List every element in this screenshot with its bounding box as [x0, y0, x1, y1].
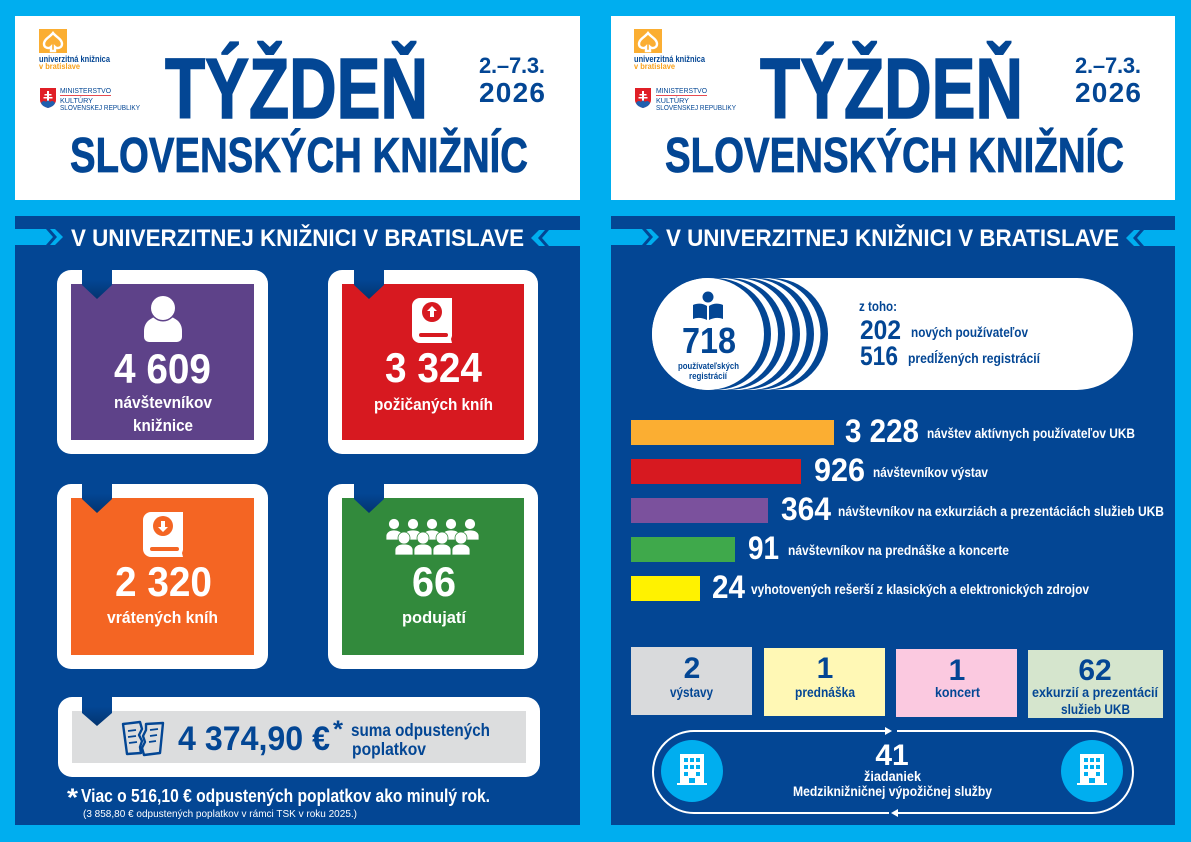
logo: university library: [39, 29, 111, 71]
box: concert: 1: [949, 654, 965, 687]
box: excursions: exkurzií a prezentácií: [1032, 684, 1159, 700]
bar: exhibitions: návštevníkov výstav: [873, 465, 988, 480]
total value: 718: [682, 320, 736, 361]
bar: lecture and concert: [631, 530, 1009, 566]
label: podujatí: [402, 608, 467, 627]
value: 41: [875, 739, 909, 772]
subtitle: SLOVENSKÝCH KNIŽNÍC: [70, 128, 528, 183]
date range: 2.–7.3.: [1075, 53, 1141, 78]
box: concert: [896, 649, 1017, 717]
logo: university library: univerzitná knižnica: [634, 54, 706, 64]
logo: ministry of culture: [40, 86, 140, 112]
panel: left statistics: [15, 216, 580, 825]
icon: reader: [693, 292, 723, 320]
icon: library building right: [1061, 740, 1123, 802]
bar: lecture and concert: návštevníkov na prednáške a koncerte: [788, 543, 1009, 558]
panel: right header: [611, 16, 1175, 200]
logo: ministry of culture: SLOVENSKEJ REPUBLIKY: [60, 103, 140, 112]
label: návštevníkov: [114, 393, 212, 412]
year: 2026: [479, 77, 545, 108]
bar: searches: 24: [712, 569, 745, 605]
new users label: nových používateľov: [911, 324, 1028, 340]
interlibrary loan ring: [653, 727, 1133, 817]
logo: ministry of culture: MINISTERSTVO: [60, 86, 111, 95]
title: TÝŽDEŇ: TÝŽDEŇ: [760, 41, 1023, 137]
banner heading: V UNIVERZITNEJ KNIŽNICI V BRATISLAVE: [666, 224, 1119, 252]
renewed label: predĺžených registrácií: [908, 349, 1041, 366]
panel: right statistics: [611, 216, 1175, 825]
bar: active users: [631, 413, 1135, 449]
icon: torn receipts: [123, 722, 163, 755]
footnote detail: (3 858,80 € odpustených poplatkov v rámci TSK v roku 2025.): [83, 808, 357, 820]
icon: library building left: [661, 740, 723, 802]
box: lecture: 1: [817, 652, 833, 685]
value: 4 374,90 €: [178, 720, 330, 758]
logo: university library: v bratislave: [634, 61, 675, 71]
box: lecture: [764, 648, 885, 716]
bookmark: [354, 264, 384, 299]
box: lecture: prednáška: [795, 684, 855, 700]
icon: book with down arrow: [143, 512, 183, 557]
bookmark: [354, 478, 384, 513]
label: suma odpustených: [351, 720, 490, 740]
logo: university library: univerzitná knižnica: [39, 54, 111, 64]
footnote: Viac o 516,10 € odpustených poplatkov ako minulý rok.: [81, 786, 490, 806]
card: returned books: [57, 478, 268, 669]
bar chart: [631, 413, 1164, 605]
logo: ministry of culture: KULTÚRY: [60, 96, 93, 105]
bar: searches: vyhotovených rešerší z klasických a elektronických zdrojov: [751, 582, 1089, 597]
total label: používateľských: [678, 361, 739, 372]
bar: exhibitions: 926: [814, 452, 865, 488]
logo: university library: v bratislave: [39, 61, 80, 71]
logo: ministry of culture: MINISTERSTVO: [656, 86, 707, 95]
ring with arrows: [653, 727, 1133, 817]
asterisk: *: [333, 716, 344, 743]
value: 66: [412, 558, 456, 605]
bar: excursions: [631, 491, 1164, 527]
registrations pill: [652, 278, 1133, 390]
icon: book with up arrow: [412, 298, 452, 343]
footnote asterisk: *: [67, 784, 78, 812]
value: 3 324: [385, 344, 483, 391]
bookmark: [82, 691, 112, 726]
bar: exhibitions: [631, 452, 988, 488]
z toho: z toho:: [859, 299, 897, 314]
logo: university library: [634, 29, 706, 71]
title: TÝŽDEŇ: TÝŽDEŇ: [165, 41, 428, 137]
icon: group of people: [386, 518, 479, 555]
date range: 2.–7.3.: [479, 53, 545, 78]
logo: ministry of culture: SLOVENSKEJ REPUBLIKY: [656, 103, 736, 112]
bookmark: [82, 264, 112, 299]
card: events: [328, 478, 538, 669]
box: excursions: [1028, 650, 1163, 718]
box: exhibitions: výstavy: [670, 684, 713, 700]
bar: active users: návštev aktívnych používateľov UKB: [927, 426, 1135, 441]
label: vrátených kníh: [107, 608, 218, 627]
box: excursions: 62: [1078, 654, 1112, 687]
banner heading: V UNIVERZITNEJ KNIŽNICI V BRATISLAVE: [71, 224, 524, 252]
new users value: 202: [860, 315, 901, 345]
box: concert: koncert: [935, 684, 980, 700]
renewed value: 516: [860, 341, 898, 371]
card: visitors: [57, 264, 268, 454]
bookmark: [82, 478, 112, 513]
value: 4 609: [114, 345, 211, 392]
year: 2026: [1075, 77, 1141, 108]
card: waived fees: [58, 691, 540, 777]
total label line 2: registrácií: [689, 371, 727, 382]
panel: left header: [15, 16, 580, 200]
bar: searches: [631, 569, 1089, 605]
bar: lecture and concert: 91: [748, 530, 779, 566]
box: exhibitions: 2: [684, 652, 700, 685]
label: žiadaniek: [864, 768, 921, 784]
value: 2 320: [115, 558, 212, 605]
logo: ministry of culture: KULTÚRY: [656, 96, 689, 105]
bar: active users: 3 228: [845, 413, 919, 449]
card: borrowed books: [328, 264, 538, 454]
icon: person: [144, 294, 182, 342]
box: excursions: služieb UKB: [1061, 701, 1130, 717]
label: požičaných kníh: [374, 395, 493, 414]
box: exhibitions: [631, 647, 752, 715]
label line 2: Medziknižničnej výpožičnej služby: [793, 783, 992, 799]
logo: ministry of culture: [635, 86, 736, 112]
stacked circles: [652, 278, 828, 390]
bar: excursions: 364: [781, 491, 831, 527]
label line 2: poplatkov: [352, 739, 426, 759]
label line 2: knižnice: [133, 416, 193, 435]
